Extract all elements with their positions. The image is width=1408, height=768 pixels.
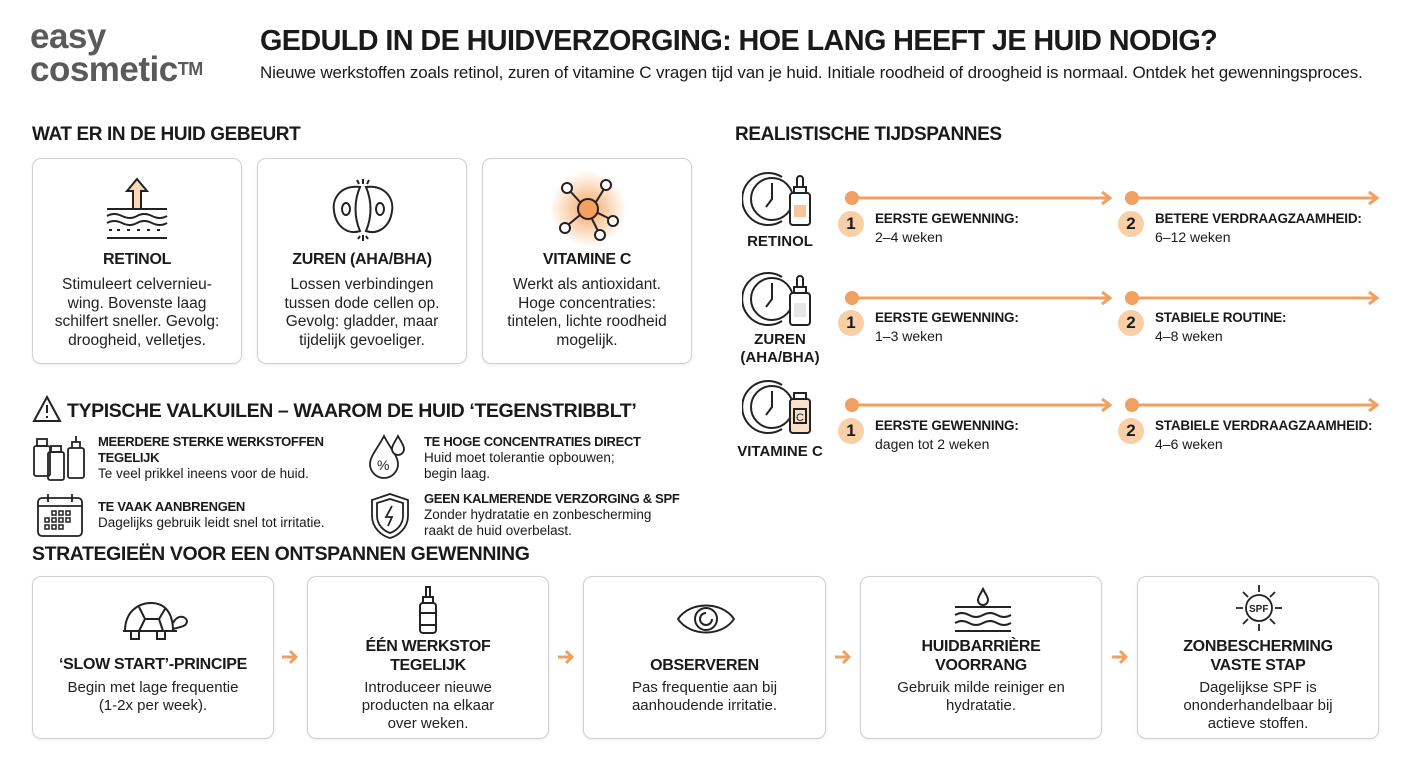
pitfall: te vaak: TE VAAK AANBRENGEN: [98, 499, 245, 514]
panel: zuren: tussen dode cellen op.: [284, 294, 440, 312]
strategy card: huidbarrière: hydratatie.: [946, 697, 1016, 714]
strategy card: één werkstof: over weken.: [388, 715, 468, 732]
timeline row: zuren: 4–8 weken: [1155, 328, 1223, 344]
icon: skin barrier: [954, 586, 1012, 632]
timeline row: zuren: STABIELE ROUTINE:: [1155, 310, 1286, 325]
timeline row: retinol: EERSTE GEWENNING:: [875, 211, 1019, 226]
icon: drops percent: [369, 434, 405, 479]
strategy card: observeren: aanhoudende irritatie.: [632, 697, 777, 714]
panel: retinol: [32, 158, 242, 364]
timeline row: zuren: ZUREN: [754, 331, 806, 348]
arrow: phase 2: [1125, 398, 1380, 412]
strategy card: observeren: [583, 576, 826, 739]
timeline row: retinol: BETERE VERDRAAGZAAMHEID:: [1155, 211, 1362, 226]
pitfall: geen kalmerende verzorging: GEEN KALMERENDE VERZORGING & SPF: [424, 491, 679, 506]
strategy card: huidbarrière: HUIDBARRIÈRE: [921, 638, 1041, 655]
timeline row: zuren: (AHA/BHA): [740, 349, 820, 366]
pitfall: meerdere werkstoffen: TEGELIJK: [98, 450, 159, 465]
arrow: [835, 650, 851, 664]
pitfall: te hoge concentraties: begin laag.: [424, 466, 490, 481]
timeline row: zuren: 1: [846, 313, 856, 332]
icon: clock and vitamin c jar: C: [796, 412, 804, 424]
timeline row: retinol: 6–12 weken: [1155, 229, 1231, 245]
panel: retinol: wing. Bovenste laag: [68, 294, 206, 312]
icon: turtle: [123, 602, 188, 640]
pitfall: te vaak: [37, 494, 325, 537]
icon: warning: [32, 395, 62, 422]
icon: clock and bottle: [742, 272, 811, 326]
timeline row: vitamine c: 4–6 weken: [1155, 436, 1223, 452]
timeline row: vitamine c: dagen tot 2 weken: [875, 436, 989, 452]
panel: zuren: tijdelijk gevoeliger.: [299, 332, 425, 348]
pitfall: te hoge concentraties: Huid moet tolerantie opbouwen;: [424, 450, 615, 465]
strategy card: huidbarrière: VOORRANG: [935, 657, 1027, 674]
icon: eye: [676, 604, 736, 634]
strategy card: zonbescherming: [1137, 576, 1379, 739]
timeline row: zuren: [740, 272, 1380, 366]
icon: sun spf: SPF: [1249, 604, 1268, 615]
panel: vitamine c: Werkt als antioxidant.: [513, 276, 661, 293]
strategy card: slow start: [32, 576, 274, 739]
heading: strategieën: STRATEGIEËN VOOR EEN ONTSPANNEN GEWENNING: [32, 543, 530, 565]
heading: realistische tijdspannes: REALISTISCHE TIJDSPANNES: [735, 124, 1002, 145]
strategy card: één werkstof: producten na elkaar: [362, 697, 494, 714]
heading: wat er in de huid gebeurt: WAT ER IN DE HUID GEBEURT: [32, 124, 300, 145]
panel: retinol: Stimuleert celvernieu-: [62, 276, 212, 293]
strategy card: zonbescherming: actieve stoffen.: [1208, 715, 1308, 732]
icon: calendar: [37, 494, 83, 537]
icon: separating cells: [332, 179, 394, 241]
strategy card: zonbescherming: ZONBESCHERMING: [1183, 638, 1333, 655]
strategy card: één werkstof: TEGELIJK: [390, 657, 466, 674]
strategy card: observeren: OBSERVEREN: [650, 657, 759, 674]
pitfall: te hoge concentraties: [369, 434, 641, 481]
timeline row: retinol: [742, 172, 1380, 250]
pitfall: meerdere werkstoffen: MEERDERE STERKE WERKSTOFFEN: [98, 434, 324, 449]
timeline row: vitamine c: 1: [846, 421, 856, 440]
strategy card: slow start: ‘SLOW START’-PRINCIPE: [59, 656, 247, 673]
pitfall: geen kalmerende verzorging: raakt de huid overbelast.: [424, 523, 572, 538]
arrow: phase 1: [845, 190, 1112, 206]
icon: molecule: [552, 173, 624, 245]
panel: vitamine c: tintelen, lichte roodheid: [507, 313, 667, 330]
logo: [30, 17, 203, 89]
timeline row: zuren: 1–3 weken: [875, 328, 943, 344]
pitfall: te hoge concentraties: TE HOGE CONCENTRATIES DIRECT: [424, 434, 641, 449]
arrow: phase 2: [1125, 290, 1380, 306]
panel: vitamine c: Hoge concentraties:: [518, 294, 656, 312]
pitfall: te vaak: Dagelijks gebruik leidt snel tot irritatie.: [98, 515, 325, 530]
strategy card: zonbescherming: Dagelijkse SPF is: [1199, 679, 1317, 696]
panel: retinol: RETINOL: [103, 251, 171, 268]
heading: typische valkuilen: TYPISCHE VALKUILEN – WAAROM DE HUID ‘TEGENSTRIBBLT’: [67, 400, 636, 422]
strategy card: huidbarrière: Gebruik milde reiniger en: [897, 679, 1065, 696]
panel: zuren: Gevolg: gladder, maar: [286, 313, 438, 330]
icon: sun spf: [1236, 585, 1282, 631]
subtitle: Nieuwe werkstoffen zoals retinol, zuren of vitamine C vragen tijd van je huid. Initiale roodheid of droogheid is normaal. Ontdek het gewenningsproces.: [260, 63, 1363, 82]
timeline row: vitamine c: EERSTE GEWENNING:: [875, 418, 1019, 433]
icon: clock and serum: [742, 172, 811, 226]
strategy card: slow start: (1-2x per week).: [99, 697, 207, 714]
timeline row: vitamine c: 2: [1126, 421, 1136, 440]
timeline row: zuren: EERSTE GEWENNING:: [875, 310, 1019, 325]
timeline row: retinol: 1: [846, 214, 856, 233]
icon: dropper bottle: [419, 586, 437, 634]
arrow: [282, 650, 298, 664]
panel: zuren: Lossen verbindingen: [290, 276, 434, 293]
timeline row: retinol: 2: [1126, 214, 1136, 233]
panel: vitamine c: mogelijk.: [556, 332, 618, 348]
icon: drops percent: %: [377, 457, 389, 473]
timeline row: vitamine c: VITAMINE C: [737, 443, 823, 460]
panel: retinol: droogheid, velletjes.: [68, 332, 206, 348]
panel: zuren: ZUREN (AHA/BHA): [292, 251, 432, 268]
title: GEDULD IN DE HUIDVERZORGING: HOE LANG HEEFT JE HUID NODIG?: [260, 25, 1217, 57]
pitfall: meerdere werkstoffen: Te veel prikkel ineens voor de huid.: [98, 466, 309, 481]
strategy card: één werkstof: ÉÉN WERKSTOF: [365, 638, 490, 655]
arrow: phase 2: [1125, 190, 1380, 206]
logo: cosmeticTM: [30, 50, 203, 89]
strategy card: zonbescherming: VASTE STAP: [1210, 657, 1306, 674]
timeline row: vitamine c: STABIELE VERDRAAGZAAMHEID:: [1155, 418, 1372, 433]
logo: easy: [30, 17, 106, 56]
panel: zuren: [257, 158, 467, 364]
strategy card: observeren: Pas frequentie aan bij: [632, 679, 777, 696]
strategy card: zonbescherming: ononderhandelbaar bij: [1183, 697, 1333, 714]
timeline row: retinol: RETINOL: [747, 233, 813, 250]
timeline row: zuren: 2: [1126, 313, 1136, 332]
icon: bottles: [33, 436, 85, 481]
strategy card: slow start: Begin met lage frequentie: [68, 679, 238, 696]
timeline row: vitamine c: [737, 380, 1380, 460]
arrow: [558, 650, 574, 664]
strategy card: één werkstof: [307, 576, 549, 739]
arrow: phase 1: [845, 290, 1112, 306]
panel: vitamine c: [482, 158, 692, 364]
pitfall: geen kalmerende verzorging: Zonder hydratatie en zonbescherming: [424, 507, 651, 522]
pitfall: meerdere werkstoffen: [33, 434, 324, 481]
panel: retinol: schilfert sneller. Gevolg:: [55, 313, 219, 330]
arrow: [1112, 650, 1128, 664]
panel: vitamine c: VITAMINE C: [543, 251, 631, 268]
timeline row: retinol: 2–4 weken: [875, 229, 943, 245]
strategy card: één werkstof: Introduceer nieuwe: [364, 679, 492, 696]
icon: clock and vitamin c jar: [742, 380, 811, 434]
icon: skin layers arrow: [106, 178, 168, 239]
pitfall: geen kalmerende verzorging: [371, 491, 680, 539]
arrow: phase 1: [845, 398, 1112, 412]
strategy card: huidbarrière: [860, 576, 1102, 739]
icon: cracked shield: [371, 493, 409, 539]
